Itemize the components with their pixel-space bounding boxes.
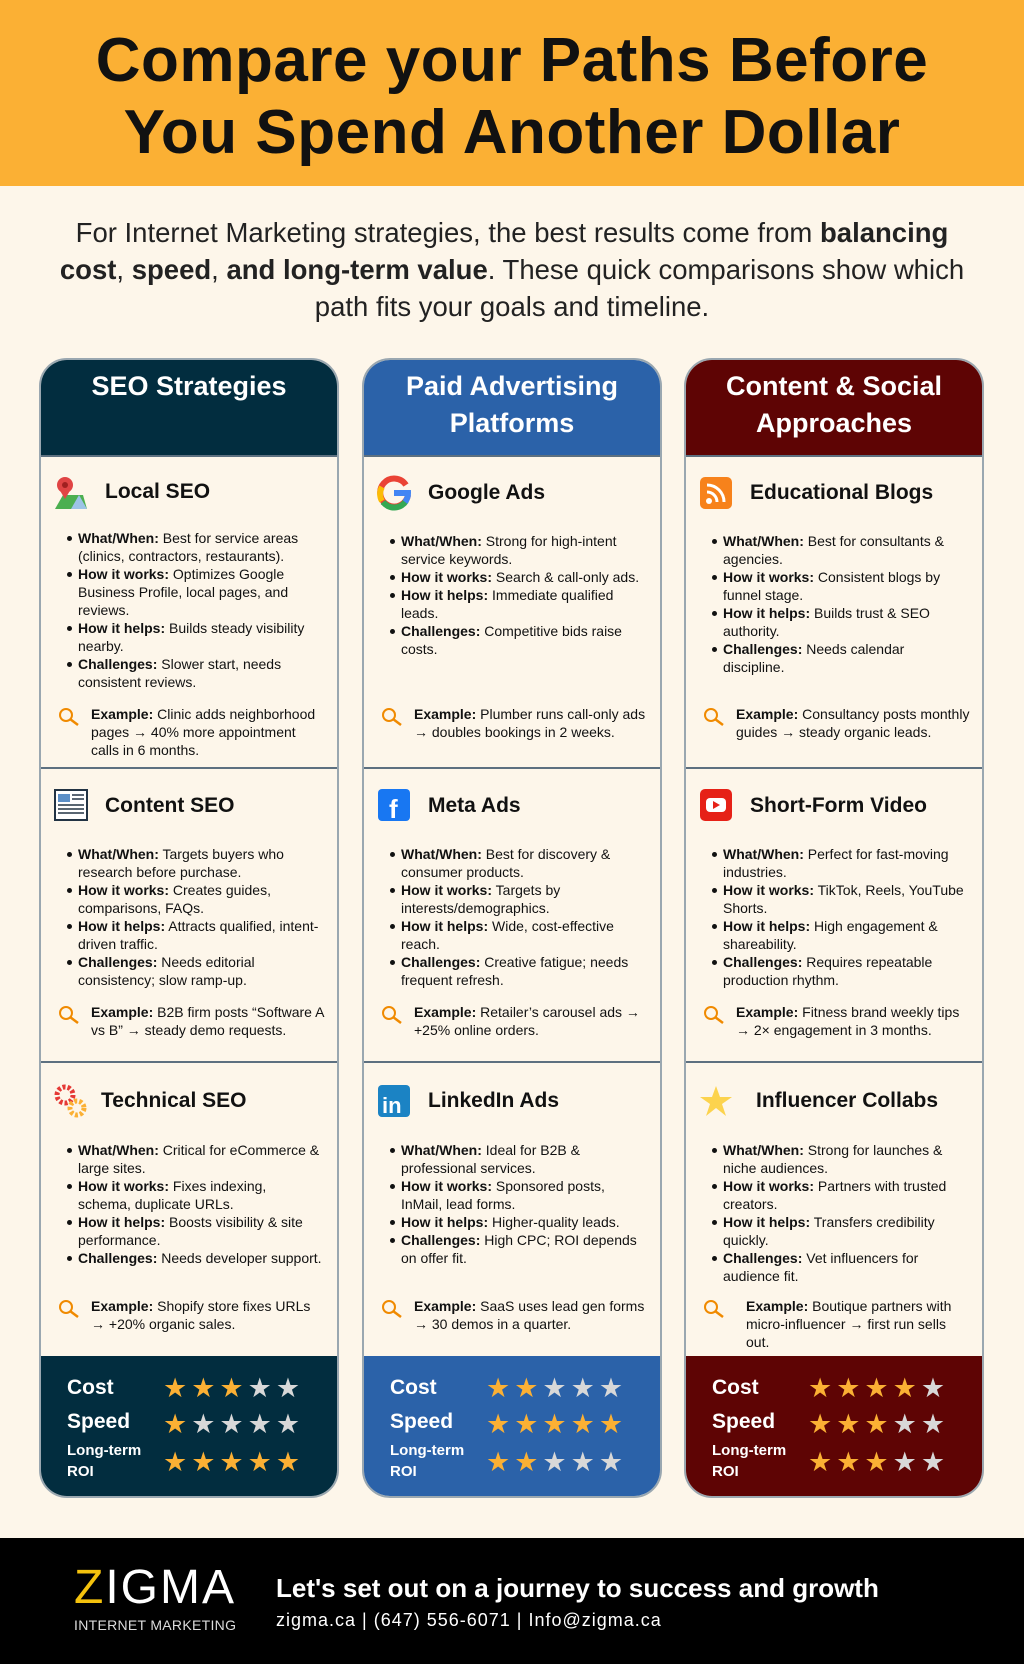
bullets: How it helps: Attracts qualified, intent-driven traffic. — [78, 918, 318, 952]
panel: SEO strategies — [39, 358, 339, 1498]
logo: ZIGMA — [74, 1561, 236, 1614]
ratings: Cost — [67, 1376, 114, 1399]
bullets: What/When: Best for consultants & agencies. — [723, 533, 944, 567]
section: Influencer Collabs — [686, 1061, 982, 1356]
section: Meta Ads — [364, 767, 660, 1061]
bullets: How it works: Creates guides, comparisons, FAQs. — [78, 882, 271, 916]
bullets: How it helps: Builds trust & SEO authority. — [723, 605, 930, 639]
section title: Technical SEO — [101, 1089, 246, 1112]
icon: linkedin: in — [382, 1093, 402, 1118]
bullets: Challenges: Competitive bids raise costs. — [401, 623, 622, 657]
tagline: Let's set out on a journey to success and growth — [276, 1573, 879, 1603]
column heading: Paid Advertising — [406, 371, 618, 401]
title — [96, 26, 928, 167]
bullets: How it works: Sponsored posts, InMail, lead forms. — [401, 1178, 605, 1212]
bullets: Challenges: Needs calendar discipline. — [723, 641, 904, 675]
bullets: Challenges: Slower start, needs consistent reviews. — [78, 656, 281, 690]
icon: magnifier — [59, 1006, 79, 1024]
column heading: Approaches — [756, 408, 912, 438]
bullets: What/When: Ideal for B2B & professional services. — [401, 1142, 580, 1176]
bullets: Challenges: Vet influencers for audience fit. — [723, 1250, 918, 1284]
title: You Spend Another Dollar — [124, 98, 900, 167]
example: Example: Clinic adds neighborhood pages → 40% more appointment calls in 6 months. — [91, 706, 315, 758]
column heading: Content & Social — [726, 371, 942, 401]
header band — [0, 0, 1024, 186]
icon: document — [54, 789, 88, 821]
section title: Google Ads — [428, 481, 545, 504]
column heading — [41, 360, 337, 455]
section: Short-Form Video — [686, 767, 982, 1061]
ratings: Cost — [390, 1376, 437, 1399]
ratings: Long-term — [712, 1442, 786, 1459]
ratings: ★★★★★ — [486, 1409, 627, 1439]
section: LinkedIn Ads — [364, 1061, 660, 1356]
ratings: Speed — [67, 1410, 130, 1433]
bullets: How it works: Consistent blogs by funnel stage. — [723, 569, 940, 603]
section: Technical SEO — [41, 1061, 337, 1356]
ratings: ★★★★★ — [163, 1409, 304, 1439]
section title: LinkedIn Ads — [428, 1089, 559, 1112]
section title: Content SEO — [105, 794, 234, 817]
bullets — [67, 846, 318, 988]
ratings: ROI — [390, 1463, 417, 1480]
bullets: What/When: Targets buyers who research before purchase. — [78, 846, 284, 880]
bullets — [712, 533, 944, 675]
example: Example: Plumber runs call-only ads → doubles bookings in 2 weeks. — [414, 706, 645, 740]
bullets: Challenges: Creative fatigue; needs frequent refresh. — [401, 954, 628, 988]
icon: magnifier — [382, 1006, 402, 1024]
section title: Influencer Collabs — [756, 1089, 938, 1112]
bullets: What/When: Strong for launches & niche audiences. — [723, 1142, 942, 1176]
ratings: ★★★★★ — [486, 1447, 627, 1477]
icon: magnifier — [704, 708, 724, 726]
ratings: ROI — [712, 1463, 739, 1480]
bullets: How it helps: Higher-quality leads. — [401, 1214, 620, 1230]
section title: Local SEO — [105, 480, 210, 503]
example: Example: Retailer’s carousel ads → +25% online orders. — [414, 1004, 640, 1038]
example: Example: B2B firm posts “Software A vs B” → steady demo requests. — [91, 1004, 324, 1038]
bullets: How it helps: High engagement & shareability. — [723, 918, 938, 952]
icon: magnifier — [704, 1006, 724, 1024]
icon: magnifier — [59, 1300, 79, 1318]
bullets: Challenges: Needs editorial consistency; slow ramp-up. — [78, 954, 255, 988]
bullets — [712, 846, 964, 988]
bullets: What/When: Best for discovery & consumer products. — [401, 846, 610, 880]
icon: magnifier — [382, 708, 402, 726]
column heading — [364, 360, 660, 455]
ratings: ★★★★★ — [808, 1409, 949, 1439]
bullets: What/When: Best for service areas (clinics, contractors, restaurants). — [78, 530, 298, 564]
bullets: How it helps: Wide, cost-effective reach. — [401, 918, 614, 952]
ratings: Long-term — [67, 1442, 141, 1459]
bullets: How it works: TikTok, Reels, YouTube Shorts. — [723, 882, 964, 916]
panel: Paid advertising — [362, 358, 662, 1498]
bullets: What/When: Critical for eCommerce & large sites. — [78, 1142, 319, 1176]
ratings: ★★★★★ — [163, 1447, 304, 1477]
column heading: Platforms — [450, 408, 574, 438]
panel: Content & social — [684, 358, 984, 1498]
bullets — [390, 533, 639, 657]
bullets: How it helps: Boosts visibility & site performance. — [78, 1214, 303, 1248]
bullets: What/When: Perfect for fast-moving industries. — [723, 846, 949, 880]
logo: INTERNET MARKETING — [74, 1617, 236, 1633]
icon: star — [700, 1086, 732, 1116]
bullets: How it helps: Builds steady visibility nearby. — [78, 620, 304, 654]
intro text: For Internet Marketing strategies, the best results come from balancing cost, speed, and long-term value. These quick comparisons show which path fits your goals and timeline. — [60, 217, 964, 322]
example: Example: Consultancy posts monthly guides → steady organic leads. — [736, 706, 969, 740]
contact: zigma.ca | (647) 556-6071 | Info@zigma.ca — [276, 1610, 662, 1630]
column heading: SEO Strategies — [91, 371, 287, 401]
ratings — [41, 1356, 337, 1500]
ratings: ★★★★★ — [486, 1373, 627, 1403]
bullets: How it works: Search & call-only ads. — [401, 569, 639, 585]
icon: facebook — [378, 789, 410, 823]
icon: magnifier — [382, 1300, 402, 1318]
ratings: ROI — [67, 1463, 94, 1480]
ratings: ★★★★★ — [808, 1447, 949, 1477]
bullets: How it works: Targets by interests/demographics. — [401, 882, 560, 916]
section: Google Ads — [364, 455, 660, 767]
bullets — [67, 1142, 322, 1266]
icon: magnifier — [704, 1300, 724, 1318]
section title: Educational Blogs — [750, 481, 933, 504]
ratings: Cost — [712, 1376, 759, 1399]
bullets: What/When: Strong for high-intent service keywords. — [401, 533, 617, 567]
bullets: Challenges: Requires repeatable production rhythm. — [723, 954, 932, 988]
bullets: How it works: Fixes indexing, schema, duplicate URLs. — [78, 1178, 266, 1212]
icon: gears — [54, 1084, 86, 1118]
bullets: How it helps: Immediate qualified leads. — [401, 587, 613, 621]
bullets — [712, 1142, 946, 1284]
title: Compare your Paths Before — [96, 26, 928, 95]
column heading — [686, 360, 982, 455]
section title: Meta Ads — [428, 794, 521, 817]
footer — [0, 1538, 1024, 1664]
bullets: How it helps: Transfers credibility quickly. — [723, 1214, 935, 1248]
section: Content SEO — [41, 767, 337, 1061]
ratings — [686, 1356, 982, 1500]
example: Example: Fitness brand weekly tips → 2× engagement in 3 months. — [736, 1004, 959, 1038]
ratings: Speed — [712, 1410, 775, 1433]
bullets — [390, 1142, 637, 1266]
bullets — [67, 530, 304, 690]
section title: Short-Form Video — [750, 794, 927, 817]
ratings: Long-term — [390, 1442, 464, 1459]
icon: youtube — [700, 789, 732, 821]
example: Example: Shopify store fixes URLs → +20% organic sales. — [91, 1298, 310, 1332]
section: Educational Blogs — [686, 455, 982, 767]
bullets — [390, 846, 628, 988]
section: Local SEO — [41, 455, 337, 767]
icon: linkedin — [378, 1085, 410, 1118]
ratings: ★★★★★ — [163, 1373, 304, 1403]
example: Example: Boutique partners with micro-influencer → first run sells out. — [746, 1298, 951, 1350]
bullets: Challenges: Needs developer support. — [78, 1250, 322, 1266]
ratings: Speed — [390, 1410, 453, 1433]
bullets: How it works: Optimizes Google Business Profile, local pages, and reviews. — [78, 566, 288, 618]
ratings: ★★★★★ — [808, 1373, 949, 1403]
icon: magnifier — [59, 708, 79, 726]
icon: google G — [377, 476, 411, 510]
example: Example: SaaS uses lead gen forms → 30 demos in a quarter. — [414, 1298, 644, 1332]
ratings — [364, 1356, 660, 1500]
icon: map pin — [55, 477, 87, 509]
bullets: How it works: Partners with trusted creators. — [723, 1178, 946, 1212]
bullets: Challenges: High CPC; ROI depends on offer fit. — [401, 1232, 637, 1266]
icon: rss — [700, 477, 732, 509]
